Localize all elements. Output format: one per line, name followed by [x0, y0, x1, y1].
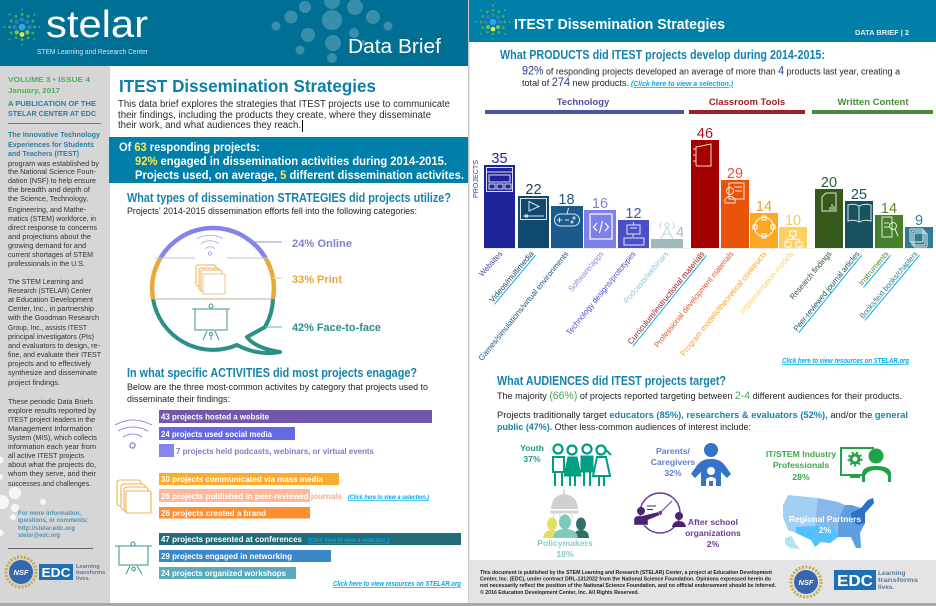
icon: presentation easel: [192, 304, 230, 340]
bar: program 14: [750, 199, 778, 248]
data briefs description: These periodic Data Briefs: [8, 397, 93, 406]
audience: regional partners: [783, 495, 874, 549]
EDC logo: EDC: [42, 565, 71, 580]
bar: social media: 24 projects used social media: [161, 430, 272, 439]
bar: research 20: [815, 175, 843, 248]
products summary: (Click here to view a selection.): [631, 79, 733, 88]
bar: website: 43 projects hosted a website: [161, 412, 269, 422]
publication notice: [480, 570, 776, 596]
rotated product labels: Professional development materials: [652, 250, 736, 349]
icon: parent with child: [691, 443, 731, 486]
intro paragraph: [118, 99, 450, 132]
label: videos with link: Videos/multimedia: [487, 249, 536, 304]
left page: [0, 0, 468, 603]
label: curriculum with link: Curriculum/instructional materials: [626, 250, 707, 346]
ITEST program description: the breadth and depth of: [8, 185, 91, 194]
label: 33% print: 33% Print: [292, 274, 342, 286]
contact information: questions, or comments:: [18, 517, 88, 524]
data briefs description: successes and challenges.: [8, 479, 91, 488]
rotated product labels: Research findings: [788, 250, 834, 301]
publication notice: not necessarily reflect the position of the National Science Foundation, and no official endorsement should be inferred.: [480, 583, 776, 589]
bar: mass media: 30 projects communicated via mass media: [161, 475, 323, 484]
masthead banner: [0, 0, 468, 66]
bar: technology 12: [618, 206, 649, 248]
icon: wifi: [115, 420, 152, 448]
publication notice: Center, Inc. (EDC), under contract DRL-1312022 from the National Science Foundation. Opinions expressed herein do: [480, 576, 772, 582]
category header: classroom tools: [689, 97, 805, 114]
data briefs description: information each year from: [8, 442, 96, 451]
audience: industry professionals: [766, 448, 891, 482]
contact information: stelar@edc.org: [18, 532, 60, 539]
stelar wordmark: stelar: [46, 4, 148, 46]
STELAR center description: with the Goodman Research: [7, 313, 99, 322]
icon: capitol with people: [543, 489, 589, 538]
bar: games 18: [551, 192, 583, 248]
data briefs description: about what the projects do,: [8, 460, 96, 469]
bar: mass media: [159, 473, 339, 485]
ITEST program description: Experiences for Students: [8, 140, 94, 149]
bar: conferences: (Click here to view a selection.): [308, 537, 389, 544]
STELAR center description: at Education Development: [8, 295, 94, 304]
issue information: A PUBLICATION OF THE: [8, 99, 96, 108]
audience: regional partners: Regional Partners: [789, 514, 861, 524]
audience: industry professionals: IT/STEM Industry: [766, 449, 836, 459]
audience: parents: [651, 443, 731, 486]
audience: parents: Parents/: [656, 446, 691, 456]
ITEST program description: [8, 130, 101, 268]
main title: ITEST Dissemination Strategies: [119, 76, 376, 96]
data briefs description: whom they serve, and their: [7, 469, 96, 478]
key findings band: [109, 137, 468, 183]
bar: games 18: 18: [558, 192, 575, 208]
audience: after school organizations: organizations: [685, 528, 741, 538]
icon: NSF seal: NSF: [14, 568, 29, 577]
arc: online 24%: [160, 228, 266, 258]
bar: software 16: [584, 196, 616, 248]
bar: videos 22: [518, 182, 549, 248]
rotated product labels: Games/simulations/virtual environments: [477, 250, 571, 363]
ITEST program description: current shortages of STEM: [8, 250, 93, 259]
audience: youth: Youth: [520, 443, 544, 453]
bar: professional 29: 29: [727, 166, 743, 182]
STELAR center description: Research (STELAR) Center: [8, 286, 91, 295]
STELAR center description: Group, Inc., assists ITEST: [8, 323, 87, 332]
publication notice: This document is published by the STEM Learning and Research (STELAR) Center, a project at Education Development: [480, 570, 772, 576]
rotated product labels: Technology designs/prototypes: [564, 250, 638, 337]
stelar tagline: STEM Learning and Research Center: [37, 47, 148, 56]
icon: stelar logo burst: [475, 4, 511, 40]
strategies heading: What types of dissemination STRATEGIES did projects utilize?: [127, 191, 451, 205]
audiences summary: Projects traditionally target educators (85%), researchers & evaluators (52%), and/or the general: [497, 410, 908, 421]
icon: NSF seal: NSF: [798, 578, 814, 587]
bar: implementation 10: 10: [785, 213, 801, 229]
key findings band: Projects used, on average, 5 different dissemination activites.: [135, 168, 464, 182]
audience: policymakers: 18%: [556, 549, 574, 559]
category header: written content: [812, 97, 933, 114]
ITEST program description: Engineering, and Mathe-: [8, 205, 86, 214]
ITEST program description: The Innovative Technology: [8, 130, 101, 139]
activities intro: Below are the three most-common activites by category that projects used to: [127, 382, 428, 393]
contact information: For more information,: [18, 510, 81, 517]
ITEST program description: dation (NSF) to help ensure: [8, 176, 96, 185]
right page: [468, 0, 936, 606]
STELAR center description: synthesize and disseminate: [8, 368, 97, 377]
EDC logo: transforms: [878, 577, 918, 584]
speech bubble chart: dissemination categories: [152, 228, 381, 353]
bar: websites 35: 35: [491, 151, 508, 167]
audience: industry professionals: 28%: [792, 472, 810, 482]
publication notice: © 2016 Education Development Center, Inc. All Rights Reserved.: [480, 589, 639, 596]
EDC logo: Learning: [76, 564, 100, 570]
contact information: http://stelar.edc.org: [18, 525, 75, 532]
bar: curriculum 46: 46: [697, 126, 713, 142]
rotated product labels: Implementation models: [738, 250, 796, 316]
category header: written content: Written Content: [837, 97, 909, 108]
audience: policymakers: [537, 489, 593, 559]
products summary: 92% of responding projects developed an average of more than 4 products last year, creating a: [522, 66, 901, 78]
issue information: [8, 75, 101, 124]
label: books with link: Books/text books/chapters: [858, 250, 920, 320]
icon: stacked pages: [117, 480, 151, 513]
products summary: total of 274 new products.: [522, 77, 629, 89]
category header: technology: [485, 97, 684, 114]
audience: youth: 37%: [523, 454, 541, 464]
EDC logo: Learning: [878, 570, 905, 577]
strategies subheading: Projects' 2014-2015 dissemination efforts fell into the following categories:: [127, 206, 417, 217]
ITEST program description: direct response to concerns: [8, 223, 97, 232]
bar: books 9: [905, 213, 933, 248]
products heading: What PRODUCTS did ITEST projects develop during 2014-2015:: [500, 48, 825, 62]
bar: social media: [159, 427, 295, 440]
audience: youth: [520, 443, 611, 486]
audience: regional partners: 2%: [819, 525, 832, 535]
footer panel: [469, 560, 936, 603]
rotated product labels: [477, 249, 920, 363]
audience: parents: Caregivers: [651, 457, 695, 467]
data briefs description: explore results reported by: [8, 406, 96, 415]
audience: after school organizations: [634, 493, 741, 549]
intro paragraph: This data brief explores the strategies that ITEST projects use to communicate: [118, 99, 450, 110]
bar: videos 22: 22: [525, 182, 542, 198]
icon: professional at monitor: [841, 448, 891, 482]
bar: journals: [159, 489, 429, 502]
audience: policymakers: Policymakers: [537, 538, 593, 548]
bar: brand: 26 projects created a brand: [161, 509, 266, 518]
bar: brand: [159, 507, 310, 518]
audience: parents: 32%: [664, 468, 682, 478]
icon: NSF seal: [791, 567, 821, 597]
data brief label: Data Brief: [348, 36, 441, 58]
data briefs description: [7, 397, 97, 488]
label: 42% face-to-face: 42% Face-to-face: [292, 322, 381, 334]
label: 24% online: 24% Online: [292, 238, 352, 250]
products summary: [522, 66, 901, 89]
rotated product labels: Podcasts/webinars: [622, 250, 671, 305]
page number: DATA BRIEF | 2: [855, 28, 909, 37]
bar chart: print activities: [117, 473, 429, 518]
issue information: STELAR CENTER AT EDC: [8, 109, 96, 118]
rotated product labels: Software/apps: [566, 250, 606, 294]
ITEST program description: and projections about the: [8, 232, 91, 241]
STELAR center description: and evaluators to design, re-: [8, 341, 100, 350]
bar: journals: 26 projects published in peer-reviewed journals: [161, 492, 342, 501]
bar: instruments 14: 14: [881, 201, 897, 217]
audience: after school organizations: 2%: [707, 539, 720, 549]
label: peer-reviewed with link: Peer-reviewed journal articles: [792, 250, 862, 333]
icon: easel: [115, 542, 152, 574]
data briefs description: System (MIS), which collects: [8, 433, 97, 442]
data briefs description: all active ITEST projects: [8, 451, 84, 460]
bar: peer reviewed 25: 25: [851, 187, 867, 203]
bar: networking: [159, 550, 331, 562]
intro paragraph: their work, and what audiences they reach.: [118, 120, 301, 131]
ITEST program description: the National Science Foun-: [8, 167, 96, 176]
bar: networking: 29 projects engaged in networking: [161, 552, 292, 561]
bar: program 14: 14: [756, 199, 772, 215]
EDC logo: lives.: [76, 576, 90, 582]
bar: professional 29: [721, 166, 749, 248]
bar: podcasts: 7 projects held podcasts, webinars, or virtual events: [176, 447, 374, 456]
STELAR center description: The STEM Learning and: [8, 277, 83, 286]
data briefs description: Management Information: [8, 424, 92, 433]
bar: podcasts 4: 4: [676, 225, 684, 241]
page title: ITEST Dissemination Strategies: [514, 16, 725, 33]
contact information: [18, 510, 88, 539]
STELAR center description: [7, 277, 101, 387]
bar: books 9: 9: [915, 213, 923, 229]
activities heading: In what specific ACTIVITIES did most projects enagage?: [127, 366, 417, 380]
bar: research 20: 20: [821, 175, 837, 191]
arc: face-to-face 42% with tail: [153, 299, 280, 353]
STELAR center description: fine, and evaluate their ITEST: [8, 350, 101, 359]
sidebar panel: [0, 66, 110, 603]
label: instruments with link: Instruments: [857, 250, 891, 287]
audiences summary: [497, 390, 908, 433]
bar chart: face-to-face activities: [115, 533, 461, 579]
STELAR center description: project findings.: [8, 378, 60, 387]
audience: industry professionals: Professionals: [773, 460, 829, 470]
page header band: [469, 0, 936, 42]
bar: curriculum 46: [691, 126, 719, 248]
EDC logo: EDC: [837, 573, 873, 590]
EDC logo: lives.: [878, 584, 894, 591]
bar: website: [159, 410, 432, 423]
bar: journals: (Click here to view a selection.): [348, 494, 429, 501]
audiences heading: What AUDIENCES did ITEST projects target?: [497, 374, 726, 388]
bar: peer reviewed 25: [845, 187, 873, 248]
bar: conferences: 47 projects presented at conferences: [161, 535, 302, 544]
key findings band: 92% engaged in dissemination activities during 2014-2015.: [135, 154, 447, 168]
icon: US map: [783, 495, 874, 549]
activities intro: [127, 382, 428, 405]
STELAR center description: Center, Inc., in partnership: [8, 304, 94, 313]
EDC logo: transforms: [76, 570, 105, 576]
icon: NSF seal: [6, 557, 36, 587]
bar chart: products developed: [484, 126, 933, 248]
bar: websites 35: [484, 151, 515, 248]
issue information: January, 2017: [8, 86, 60, 95]
ITEST program description: matics (STEM) workforce, in: [8, 214, 96, 223]
STELAR center description: principal investigators (PIs): [8, 332, 94, 341]
ITEST program description: and Teachers (ITEST): [8, 149, 79, 158]
link: STELAR resources: Click here to view resources on STELAR.org: [333, 579, 461, 588]
bar: implementation 10: [779, 213, 807, 248]
bar: workshops: 24 projects organized workshops: [161, 569, 286, 578]
ITEST program description: growing demand for and: [8, 241, 86, 250]
bar chart: online activities: [115, 410, 432, 457]
icon: stelar logo burst: [4, 8, 40, 46]
rotated product labels: Websites: [477, 249, 504, 278]
icon: teacher and student in circle: [634, 493, 686, 533]
activities intro: disseminate their findings:: [127, 394, 230, 405]
audiences summary: The majority (66%) of projects reported targeting between 2-4 different audiences for their products.: [497, 390, 902, 402]
STELAR center description: projects and to effectively: [8, 359, 91, 368]
bar: technology 12: 12: [625, 206, 642, 222]
category header: technology: Technology: [557, 97, 610, 108]
ITEST program description: the Science, Technology,: [8, 194, 88, 203]
category header: classroom tools: Classroom Tools: [709, 97, 785, 108]
ITEST program description: program was established by: [8, 159, 99, 168]
bar: podcasts: [159, 444, 374, 457]
key findings band: Of 63 responding projects:: [119, 140, 260, 154]
icon: stacked print pages: [196, 265, 225, 294]
EDC logo: [39, 564, 105, 582]
bar: software 16: 16: [592, 196, 608, 212]
axis label: projects: PROJECTS: [471, 160, 480, 198]
ITEST program description: professionals in the U.S.: [8, 259, 85, 268]
audience: after school organizations: After school: [688, 517, 738, 527]
issue information: VOLUME 3 • ISSUE 4: [8, 75, 91, 84]
bar: podcasts 4: [651, 222, 684, 248]
icon: wifi: [197, 235, 223, 255]
icon: four children: [553, 444, 611, 486]
bar: conferences: [159, 533, 461, 545]
rotated product labels: Program models/theoretical constructs: [678, 250, 769, 358]
bar: instruments 14: [875, 201, 903, 248]
audiences summary: public (47%). Other less-common audiences of interest include:: [497, 422, 751, 433]
EDC logo: [834, 570, 918, 591]
data briefs description: ITEST project leaders in the: [8, 415, 95, 424]
arc: print 33%: [152, 258, 274, 299]
intro paragraph: their findings, including the products they create, where they disseminate: [118, 110, 431, 121]
